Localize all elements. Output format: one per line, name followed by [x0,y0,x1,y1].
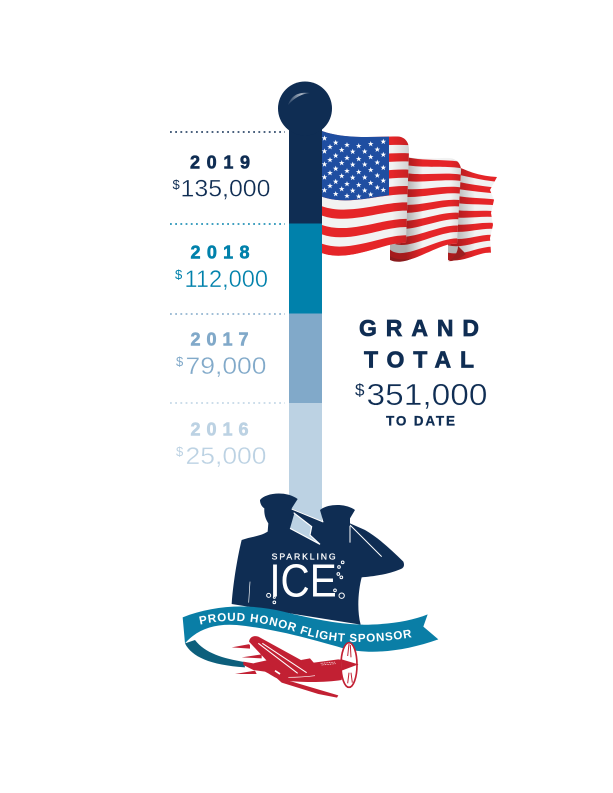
year block: 2016: $ [176,444,184,459]
year block: 2018: 112,000 [184,266,268,293]
grand total: TOTAL [364,347,474,373]
year block: 2017 [176,330,266,380]
grand total: GRAND [359,315,479,341]
year block: 2019: $ [172,177,180,192]
grand total [355,315,488,429]
icon: american flag [322,131,497,262]
icon: red airplane [232,636,358,698]
year block: 2018: 2018 [190,243,250,263]
year block: 2016 [176,420,266,470]
dotted dividers [170,132,285,403]
icon: saluting soldiers [232,494,404,625]
logo: sparkling ice: ICE [269,555,337,607]
year block: 2017: 2017 [190,330,248,350]
grand total: $ [355,380,365,400]
year block: 2017: 79,000 [186,353,266,380]
year block: 2019: 2019 [190,153,250,173]
logo: sparkling ice: SPARKLING [272,551,336,561]
year block: 2016: 25,000 [186,443,266,470]
year block: 2019 [172,153,270,203]
flagpole [278,82,332,543]
year block: 2017: $ [176,354,184,369]
grand total: TO DATE [386,414,455,429]
year block: 2019: 135,000 [180,176,270,203]
logo: saluting soldiers, ribbon and plane [182,494,438,698]
grand total: 351,000 [366,377,488,412]
year block: 2018 [175,243,268,293]
ribbon [182,606,438,668]
ribbon text: PROUD HONOR FLIGHT SPONSOR [199,612,412,642]
year block: 2016: 2016 [190,420,248,440]
year block: 2018: $ [175,267,183,282]
